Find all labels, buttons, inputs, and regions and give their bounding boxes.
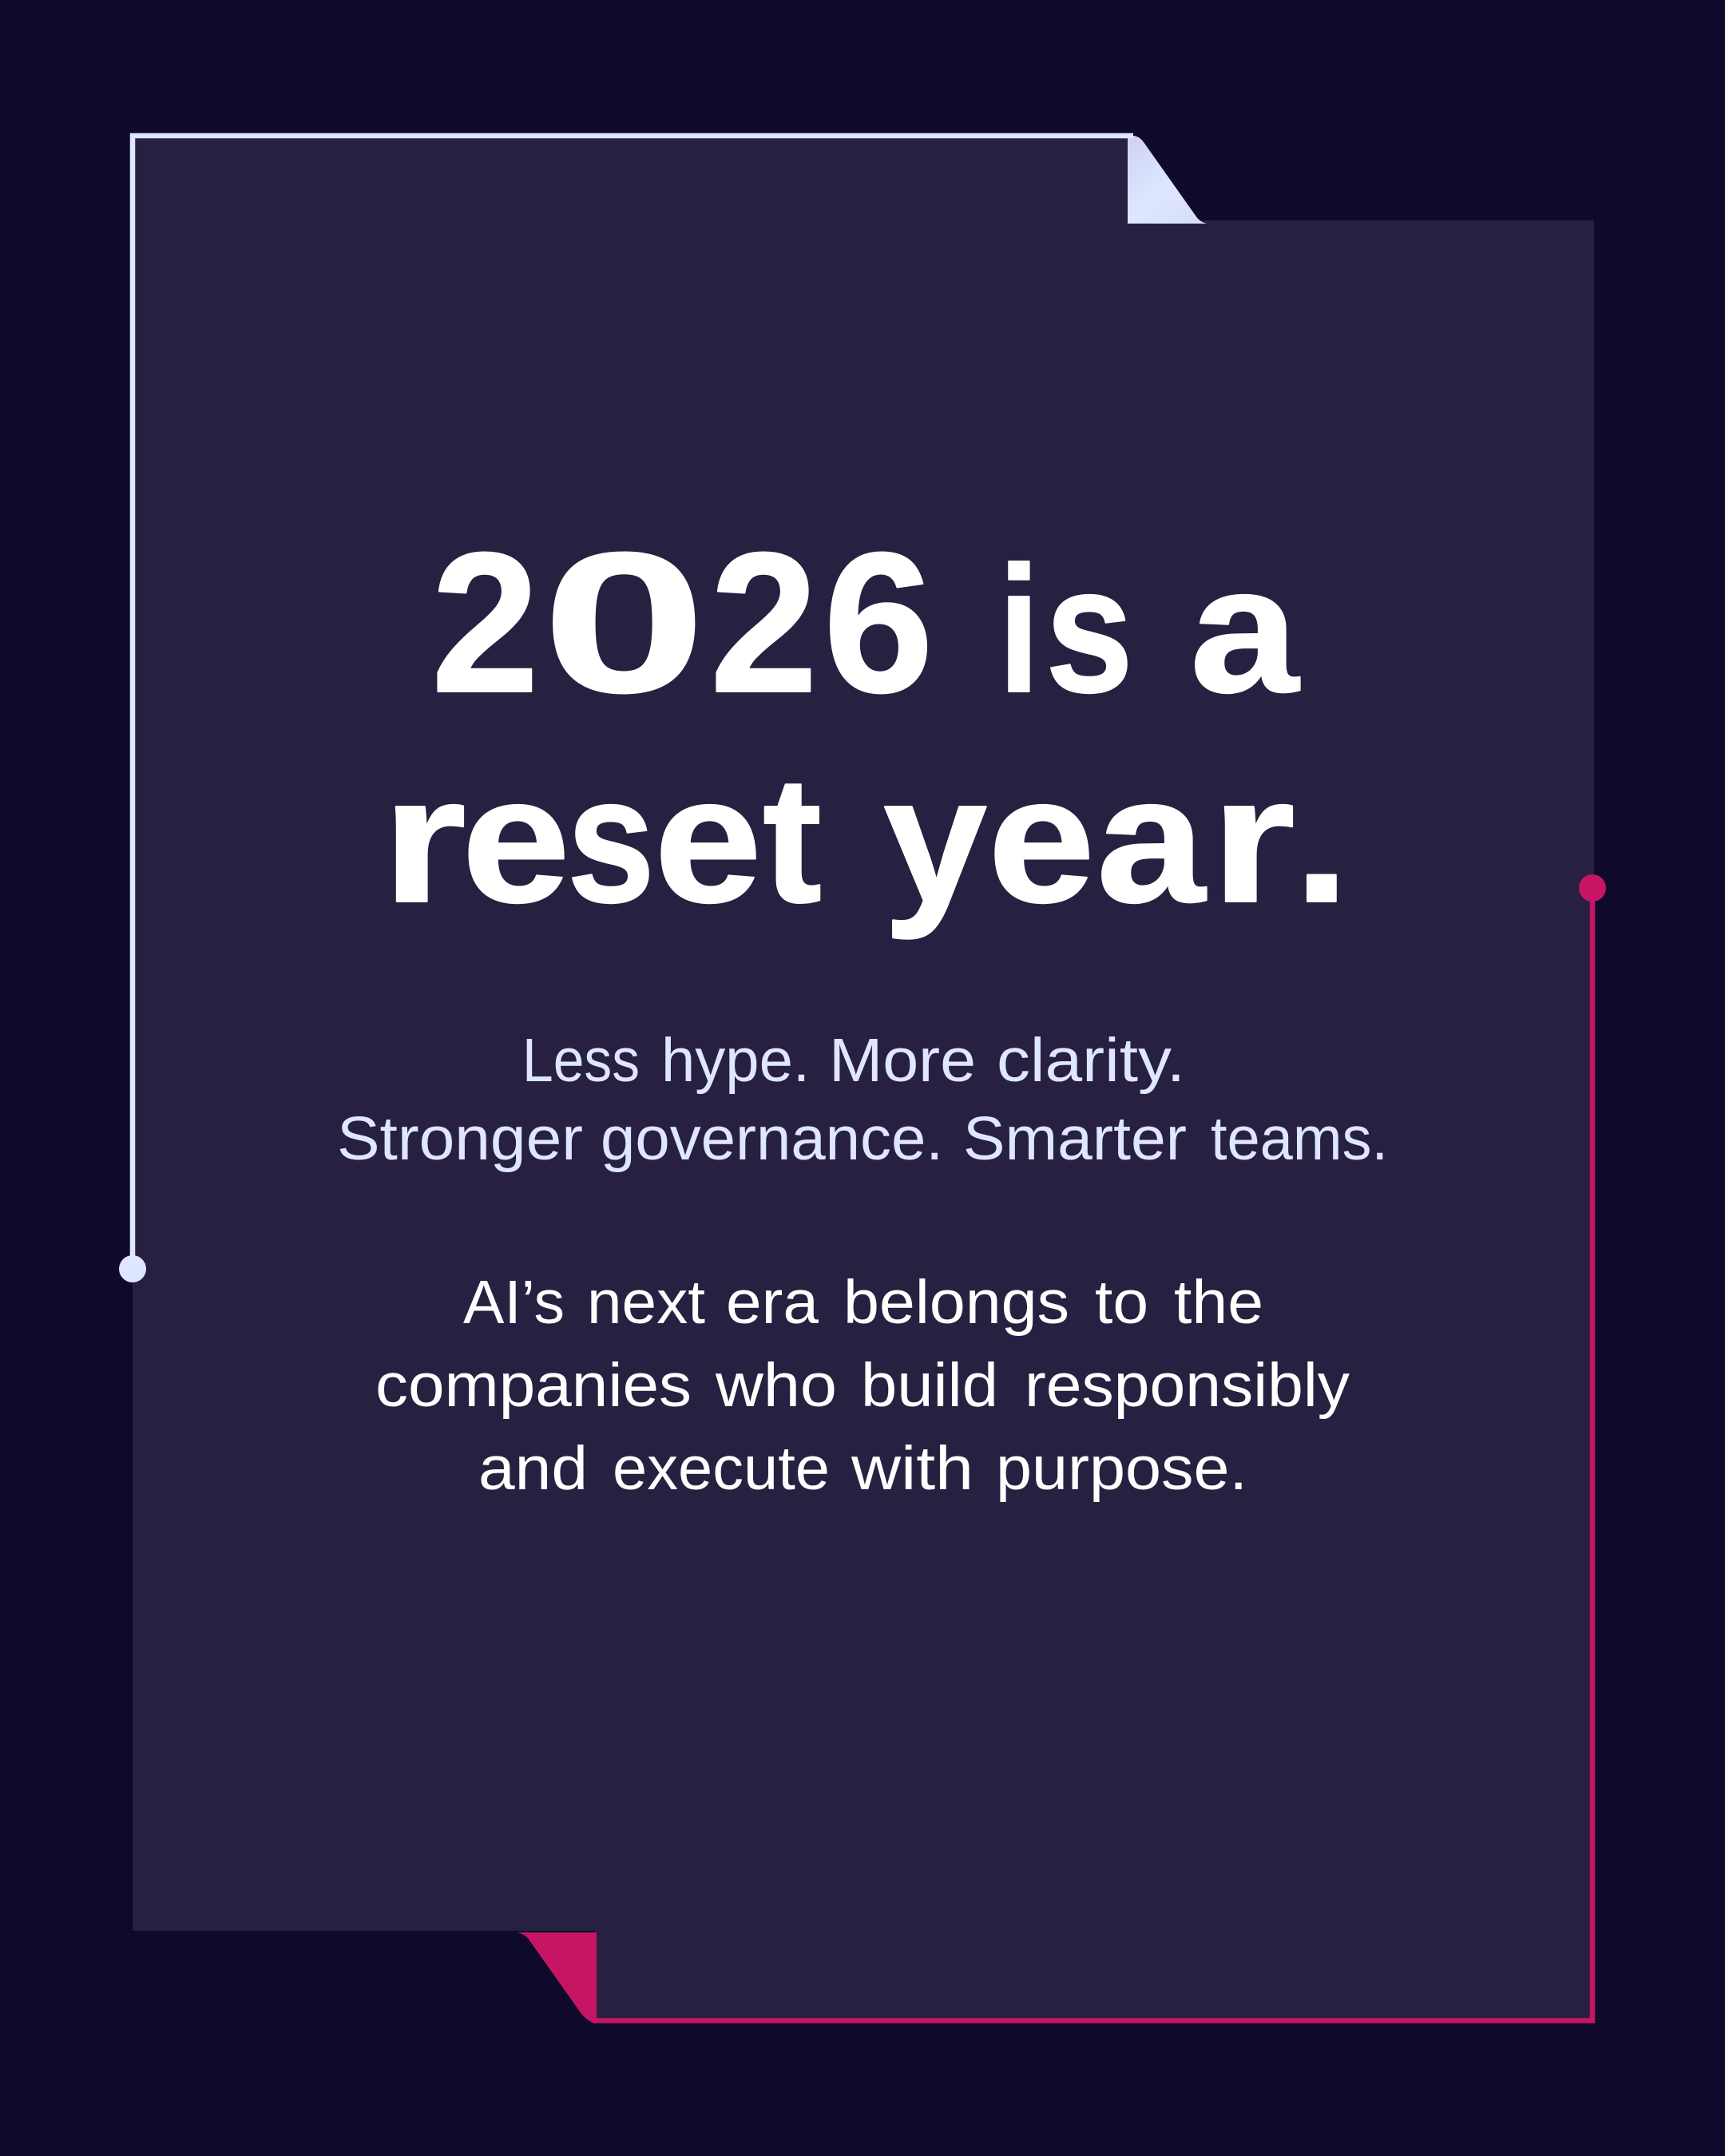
closing statement: responsibly [1025, 1351, 1350, 1420]
pale border line with dot [119, 136, 1133, 1282]
closing statement: era [726, 1268, 819, 1337]
panel: dark notched page [133, 136, 1594, 2020]
icon: pale folded corner [1128, 136, 1208, 224]
title: 0 [542, 511, 706, 734]
title: r [1211, 739, 1295, 940]
title: s [567, 739, 655, 940]
subtitle: Smarter [963, 1104, 1187, 1173]
subtitle: clarity. [997, 1026, 1185, 1095]
closing statement: the [1174, 1268, 1263, 1337]
subtitle: Stronger [337, 1104, 583, 1173]
pink border line with dot [593, 874, 1606, 2020]
closing statement: purpose. [996, 1434, 1247, 1503]
closing statement: belongs [843, 1268, 1069, 1337]
subtitle: hype. [661, 1026, 810, 1095]
subtitle: governance. [601, 1104, 943, 1173]
closing statement: companies [375, 1351, 692, 1420]
closing statement: with [851, 1434, 974, 1503]
title: e [988, 739, 1095, 940]
closing statement: next [587, 1268, 705, 1337]
title: 2 [710, 511, 818, 734]
subtitle: Less [522, 1026, 640, 1095]
subtitle: teams. [1211, 1104, 1388, 1173]
closing statement: build [861, 1351, 998, 1420]
title: y [883, 739, 987, 940]
title [382, 511, 1350, 940]
title: a [1096, 739, 1207, 940]
closing statement [375, 1268, 1350, 1503]
closing statement: AI’s [463, 1268, 565, 1337]
title: i [998, 529, 1040, 730]
title: a [1190, 529, 1300, 730]
icon: pink folded corner [516, 1932, 597, 2023]
title: e [462, 739, 570, 940]
subtitle [337, 1026, 1388, 1173]
title: s [1045, 529, 1133, 730]
subtitle: More [829, 1026, 976, 1095]
title: r [382, 739, 466, 940]
title: . [1294, 739, 1350, 940]
title: 6 [823, 511, 934, 734]
closing statement: who [715, 1351, 837, 1420]
title: t [763, 739, 822, 940]
title: 2 [431, 511, 539, 734]
title: e [654, 739, 762, 940]
closing statement: execute [613, 1434, 830, 1503]
closing statement: to [1095, 1268, 1148, 1337]
closing statement: and [478, 1434, 588, 1503]
